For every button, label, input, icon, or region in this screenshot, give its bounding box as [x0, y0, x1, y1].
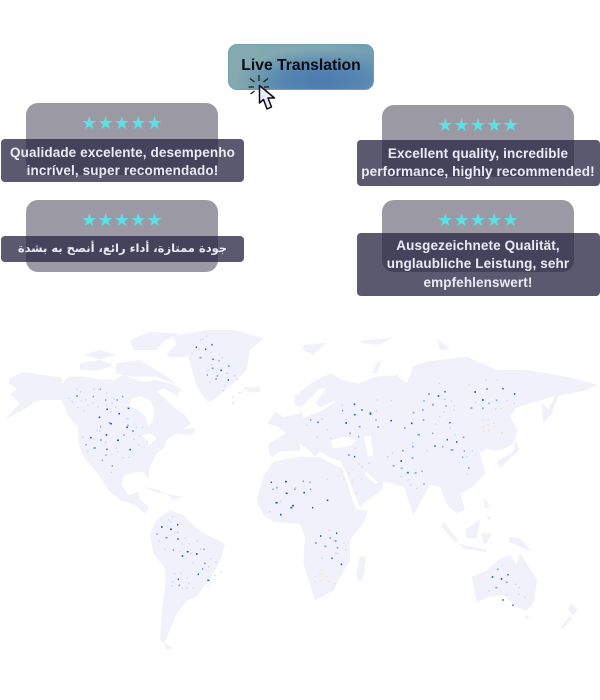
review: Portuguese: [1, 103, 244, 182]
caption: [356, 233, 600, 296]
card background with stars: ★★★★★: [81, 210, 163, 231]
card background with stars: ★★★★★: [437, 210, 519, 231]
caption: Excellent quality, incredible: [388, 146, 568, 161]
review: Arabic: [1, 200, 244, 272]
card background with stars: [26, 103, 218, 175]
button: Live Translation: [228, 44, 374, 90]
button: Live Translation: Live Translation: [241, 57, 361, 74]
caption: performance, highly recommended!: [361, 164, 595, 179]
card background with stars: ★★★★★: [81, 113, 163, 134]
caption: unglaubliche Leistung, sehr: [387, 256, 569, 271]
caption: incrível, super recomendado!: [27, 163, 218, 178]
city dots: [68, 336, 296, 588]
icon: cursor with click sparks: [248, 75, 276, 110]
caption: Ausgezeichnete Qualität,: [396, 238, 560, 253]
caption: Qualidade excelente, desempenho: [10, 145, 235, 160]
caption: empfehlenswert!: [423, 275, 533, 290]
caption: [1, 139, 244, 182]
caption: [356, 140, 600, 186]
card background with stars: [26, 200, 218, 272]
landmasses: [5, 330, 300, 650]
caption: جودة ممتازة، أداء رائع، أنصح به بشدة: [18, 241, 227, 255]
review: English: [357, 105, 600, 186]
caption: [1, 236, 244, 262]
review: German: [357, 200, 600, 296]
card background with stars: [382, 200, 574, 272]
card background with stars: ★★★★★: [437, 115, 519, 136]
card background with stars: [382, 105, 574, 177]
